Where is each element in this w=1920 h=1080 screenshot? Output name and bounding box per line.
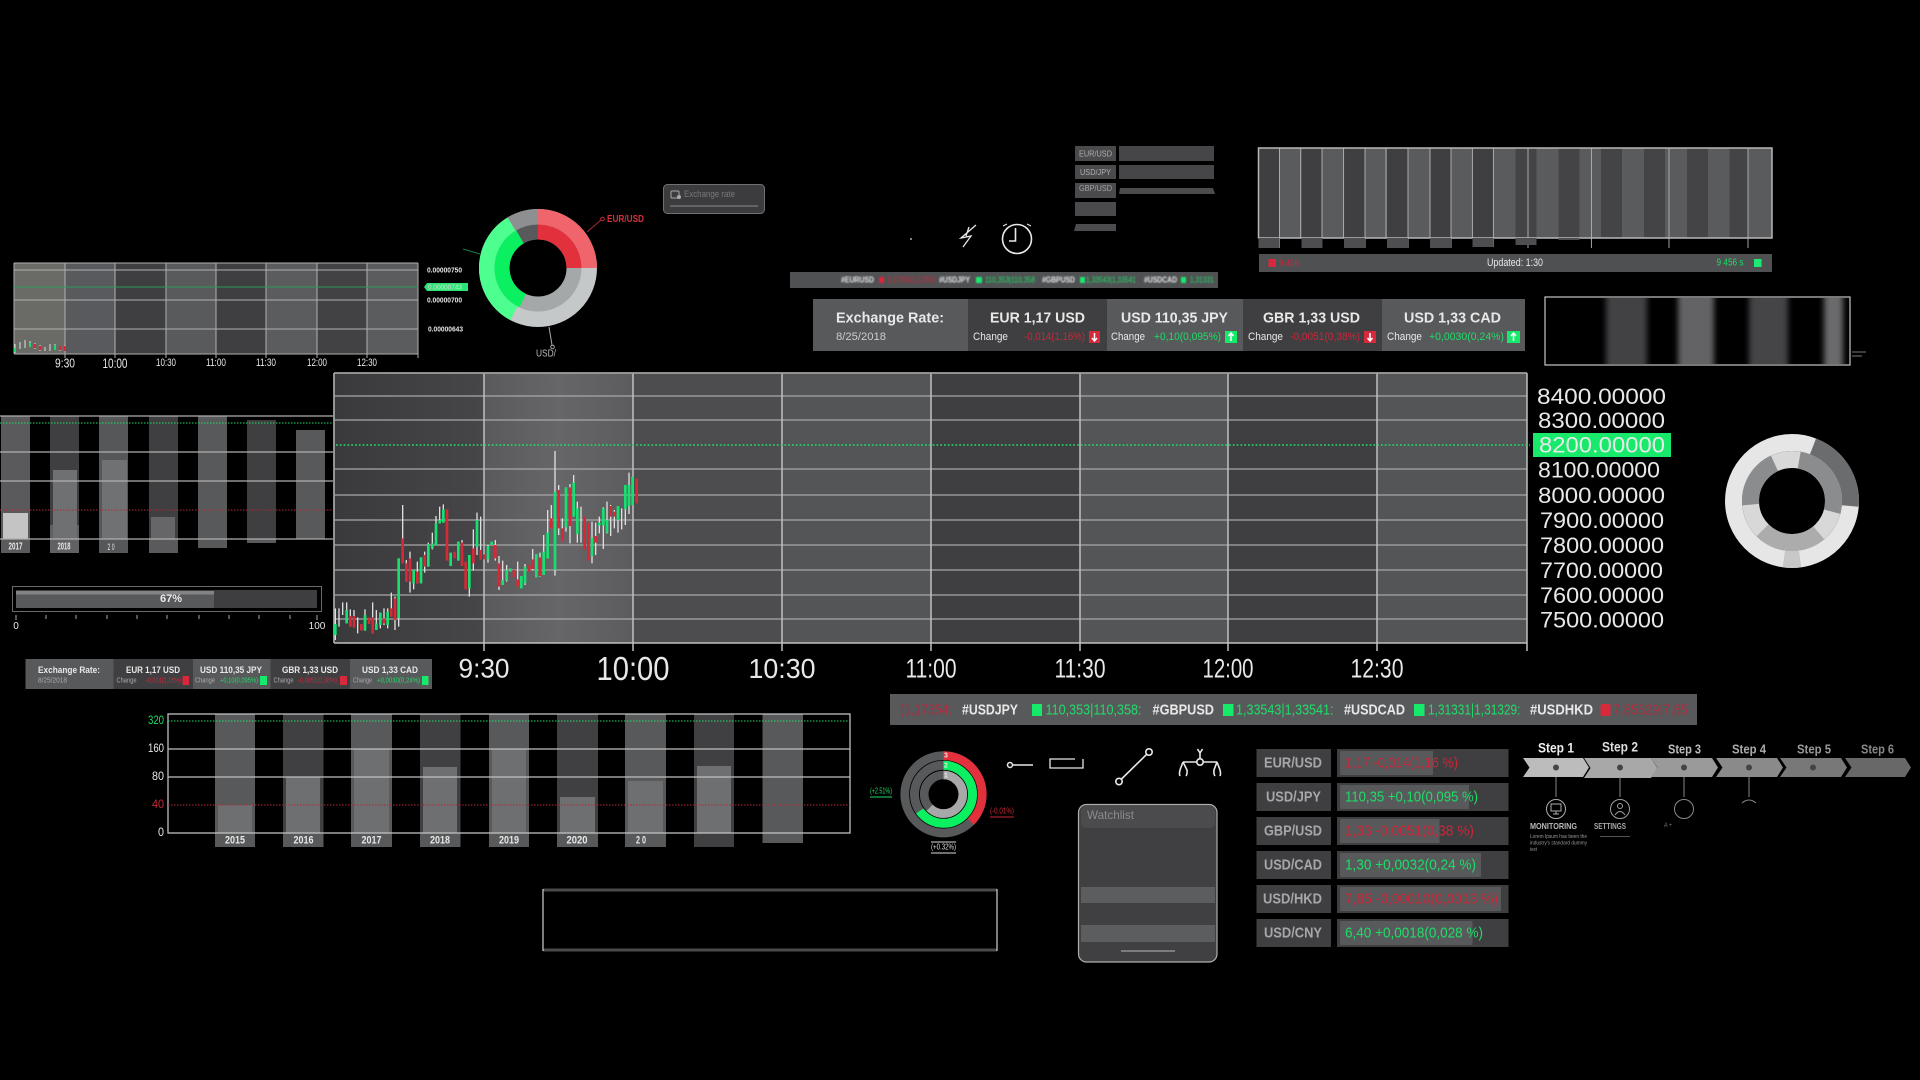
small chart time axis: 12:30 <box>357 357 377 369</box>
row: USD/HKD <box>1256 885 1508 913</box>
icon: crane claw <box>1180 749 1220 776</box>
row: GBP/USD: GBP/USD <box>1264 822 1322 840</box>
small exchange rate strip: Change <box>116 678 137 684</box>
time axis: 10:30 <box>748 653 816 684</box>
ticker: currency quotes: (1,17354: <box>900 702 952 718</box>
gauge callouts: (+0.32%) <box>931 842 956 852</box>
icon: clock <box>1002 224 1032 254</box>
small exchange rate strip: USD 110,35 JPY <box>200 665 262 675</box>
ticker: currency quotes: #USDCAD <box>1344 702 1405 718</box>
striped bar panel top right <box>1258 148 1772 272</box>
time axis: 12:00 <box>1202 654 1254 684</box>
axis labels: 40 <box>152 799 164 811</box>
row: USD/CAD <box>1256 851 1508 879</box>
blurred ticker strip: #USDJPY <box>939 276 971 284</box>
rate cell: EUR: EUR 1,17 USD <box>990 310 1085 326</box>
step captions: SETTINGS <box>1594 821 1626 831</box>
rate cell: JPY: +0,10(0,095%) <box>1154 331 1221 343</box>
small chart time axis: 11:30 <box>256 357 276 369</box>
small line chart panel <box>14 263 468 371</box>
small chart value axis: 0.00000743 <box>428 282 462 292</box>
rate cell: GBR: Change <box>1248 331 1283 343</box>
rate cell: EUR: -0,014(1,16%) <box>1024 331 1085 343</box>
time axis <box>458 650 1404 687</box>
exchange rate strip: Exchange Rate: <box>836 310 944 326</box>
row: USD/HKD: USD/HKD <box>1263 890 1322 908</box>
yearly bar chart <box>148 714 850 847</box>
small dot <box>910 238 912 240</box>
row: EUR/USD: 1,17 -0,014(1,16 %) <box>1345 754 1458 772</box>
blurred ticker strip: 1,31331 <box>1190 276 1214 284</box>
small exchange rate strip: GBR 1,33 USD <box>282 665 338 675</box>
small exchange rate strip: Change <box>274 678 294 684</box>
small chart time axis <box>55 355 377 371</box>
pair list, fading in: USD/JPY <box>1080 167 1111 177</box>
search box: exchange rate <box>664 184 764 214</box>
step captions <box>1530 821 1672 853</box>
small exchange rate strip: EUR 1,17 USD <box>126 665 180 675</box>
small exchange rate strip: -0,0051(0,38%) <box>298 678 337 684</box>
search box: exchange rate: Exchange rate <box>684 189 735 199</box>
small chart candles <box>15 340 65 353</box>
icon: lightning lines <box>961 225 976 247</box>
step titles: Step 5 <box>1797 742 1831 756</box>
pair list, fading in <box>1074 146 1215 231</box>
icon: empty step circles <box>1674 800 1756 818</box>
small exchange rate strip: 8/25/2018 <box>38 678 67 684</box>
blurred ticker strip: #USDCAD <box>1144 276 1177 284</box>
value axis: 7600.00000 <box>1540 583 1664 608</box>
left bar chart: 2017 <box>8 542 23 552</box>
rate cell: GBR: -0,0051(0,38%) <box>1290 331 1360 343</box>
small exchange rate strip: -0,014(1,16%) <box>146 678 181 684</box>
grey donut <box>1716 425 1868 577</box>
step titles: Step 3 <box>1668 742 1701 756</box>
value axis: 7800.00000 <box>1540 533 1664 558</box>
rate cell: EUR <box>973 310 1100 343</box>
time axis: 12:30 <box>1350 654 1404 684</box>
blurred ticker strip <box>790 272 1218 288</box>
small chart time axis: 9:30 <box>55 356 75 370</box>
bar group <box>1 416 325 553</box>
ticker: currency quotes: 7,85529|7,85 <box>1613 702 1688 718</box>
year labels: 2016 <box>294 834 314 846</box>
axis labels <box>148 715 164 839</box>
year labels: 2020 <box>566 834 588 846</box>
time axis: 11:30 <box>1054 654 1106 684</box>
step titles: Step 2 <box>1602 740 1638 754</box>
ticker: currency quotes <box>890 694 1697 725</box>
value axis: 8300.00000 <box>1538 408 1665 433</box>
progress bar: 67%: 100 <box>309 621 326 632</box>
row: GBP/USD <box>1256 817 1508 845</box>
step captions: A + <box>1664 823 1672 829</box>
left bar chart: 2 0 <box>108 542 114 552</box>
small chart value axis: 0.00000643 <box>428 324 463 334</box>
icon: monitoring <box>1546 800 1566 818</box>
year labels: 2019 <box>499 834 519 846</box>
row: USD/JPY: 110,35 +0,10(0,095 %) <box>1345 788 1478 806</box>
year labels: 2018 <box>430 834 450 846</box>
year labels: 2015 <box>225 834 245 846</box>
small exchange rate strip <box>26 659 432 689</box>
rate cell: CAD: +0,0030(0,24%) <box>1429 331 1504 343</box>
bar tabs <box>1258 238 1580 248</box>
time axis: 11:00 <box>906 654 956 684</box>
radial gauge: 2 <box>944 762 948 770</box>
time axis: 10:00 <box>596 650 670 687</box>
row: USD/CAD: USD/CAD <box>1264 856 1322 874</box>
value axis <box>1533 384 1671 632</box>
value axis: 8400.00000 <box>1537 384 1666 409</box>
chevrons <box>1523 758 1911 778</box>
axis labels: 160 <box>148 743 164 755</box>
step captions: MONITORING <box>1530 821 1577 831</box>
donut chart: currency share: USD/ <box>536 348 556 360</box>
radial gauge: 1 <box>944 772 948 780</box>
blurred ticker strip: 110,353|110,358 <box>985 276 1035 284</box>
small exchange rate strip: +0,0030(0,24%) <box>377 678 420 684</box>
year labels: 2017 <box>362 834 382 846</box>
axis labels: 80 <box>152 771 164 783</box>
ticker: currency quotes: #GBPUSD <box>1152 702 1214 718</box>
small chart value axis <box>424 266 468 334</box>
ticker: currency quotes: 1,31331|1,31329: <box>1428 702 1520 718</box>
rate cell: EUR: Change <box>973 331 1008 343</box>
rate cell: JPY <box>1111 310 1237 343</box>
value axis: 7500.00000 <box>1540 608 1664 632</box>
empty frame <box>543 889 997 951</box>
step captions: Lorem Ipsum has been the <box>1530 834 1587 840</box>
progress bar: 67%: 0 <box>13 621 19 632</box>
rate cell: CAD <box>1387 310 1520 343</box>
icon: setting <box>1610 800 1630 818</box>
gauge callouts <box>870 786 1014 853</box>
small chart time axis: 11:00 <box>206 357 226 369</box>
updated status bar <box>1259 254 1772 272</box>
step captions: text <box>1530 847 1538 853</box>
small chart time axis: 10:00 <box>102 355 128 371</box>
value axis: 7700.00000 <box>1540 558 1663 583</box>
row: EUR/USD: EUR/USD <box>1264 754 1322 772</box>
watchlist panel: Watchlist <box>1087 808 1135 822</box>
currency pairs table <box>1256 749 1508 947</box>
row: EUR/USD <box>1256 749 1508 777</box>
rate cell: GBR <box>1248 310 1376 343</box>
blurred ticker strip: 1,17354|1,17350 <box>887 276 935 284</box>
blurred ticker strip: 1,33543|1,33541 <box>1086 276 1136 284</box>
row: USD/CAD: 1,30 +0,0032(0,24 %) <box>1345 856 1476 874</box>
icon: diagonal connector <box>1116 749 1152 785</box>
updated status bar: 9 456 <box>1279 258 1299 268</box>
progress bar: 67% <box>12 586 326 632</box>
exchange rate strip <box>813 299 1525 351</box>
small exchange rate strip: USD 1,33 CAD <box>362 665 418 675</box>
row: USD/JPY: USD/JPY <box>1266 788 1321 806</box>
yearly bars <box>215 714 803 847</box>
radial gauge <box>870 752 1014 853</box>
ticker: currency quotes: 1,33543|1,33541: <box>1236 702 1334 718</box>
row: USD/HKD: 7,85 -0,00010(0,0013 %) <box>1345 890 1498 908</box>
updated status bar: Updated: 1:30 <box>1487 257 1543 269</box>
main candlestick chart <box>334 373 1671 687</box>
exchange rate strip: 8/25/2018 <box>836 331 886 343</box>
pair list, fading in: GBP/USD <box>1079 183 1112 193</box>
small chart value axis: 0.00000750 <box>427 266 462 274</box>
gauge callouts: (+2.51%) <box>870 786 892 796</box>
left bar chart <box>0 416 333 553</box>
blurred ticker strip: #GBPUSD <box>1042 276 1075 284</box>
small exchange rate strip: Exchange Rate: <box>38 665 100 675</box>
row: USD/JPY <box>1256 783 1508 811</box>
rate cell: GBR: GBR 1,33 USD <box>1263 310 1360 326</box>
value axis: 8100.00000 <box>1538 458 1660 482</box>
time axis: 9:30 <box>458 654 510 684</box>
left bar chart: 2018 <box>58 542 71 552</box>
small exchange rate strip: +0,10(0,095%) <box>220 678 258 684</box>
small chart value axis: 0.00000700 <box>427 296 462 304</box>
donut chart: currency share: EUR/USD <box>607 213 644 225</box>
progress bar: 67%: 67% <box>160 593 182 605</box>
step titles: Step 4 <box>1732 742 1767 756</box>
ticker: currency quotes: #USDJPY <box>962 702 1018 718</box>
rate cell: JPY: Change <box>1111 331 1145 343</box>
step titles: Step 6 <box>1861 742 1894 756</box>
step captions: industry's standard dummy <box>1530 840 1587 846</box>
small exchange rate strip: Change <box>353 678 372 684</box>
pair list, fading in: EUR/USD <box>1079 148 1112 158</box>
icon: pin line <box>1008 762 1033 768</box>
axis labels: 320 <box>148 715 164 727</box>
radial gauge: 3 <box>944 752 948 760</box>
icon: open rectangle <box>1050 759 1083 768</box>
rate cell: CAD: Change <box>1387 331 1422 343</box>
ticker: currency quotes: #USDHKD <box>1530 702 1593 718</box>
blurred ticker strip: #EURUSD <box>841 276 874 284</box>
value axis: 7900.00000 <box>1540 508 1664 533</box>
small chart time axis: 12:00 <box>307 357 327 369</box>
axis labels: 0 <box>158 827 164 839</box>
year labels: 2 0 <box>636 834 646 846</box>
row: USD/CNY: USD/CNY <box>1264 924 1322 942</box>
row: GBP/USD: 1,33 -0,0051(0,38 %) <box>1345 822 1474 840</box>
candlesticks <box>335 451 637 640</box>
watchlist panel <box>1078 804 1217 962</box>
rate cell: JPY: USD 110,35 JPY <box>1121 310 1228 326</box>
rate cell: CAD: USD 1,33 CAD <box>1404 310 1501 326</box>
row: USD/CNY <box>1256 919 1508 947</box>
updated status bar: 9 456 s <box>1716 258 1744 268</box>
step titles <box>1538 740 1894 756</box>
gauge callouts: (-0.01%) <box>990 806 1014 816</box>
chart columns <box>334 373 1527 643</box>
ticker: currency quotes: 110,353|110,358: <box>1046 702 1142 718</box>
value axis: 8000.00000 <box>1538 483 1665 508</box>
step titles: Step 1 <box>1538 740 1574 756</box>
steps process <box>1523 740 1911 853</box>
blurred stripe panel <box>1545 297 1866 365</box>
small chart time axis: 10:30 <box>156 357 176 369</box>
row: USD/CNY: 6,40 +0,0018(0,028 %) <box>1345 924 1483 942</box>
small exchange rate strip: Change <box>195 678 215 684</box>
year labels <box>225 834 646 846</box>
value axis: 8200.00000 <box>1539 432 1665 458</box>
donut chart: currency share <box>463 198 644 360</box>
